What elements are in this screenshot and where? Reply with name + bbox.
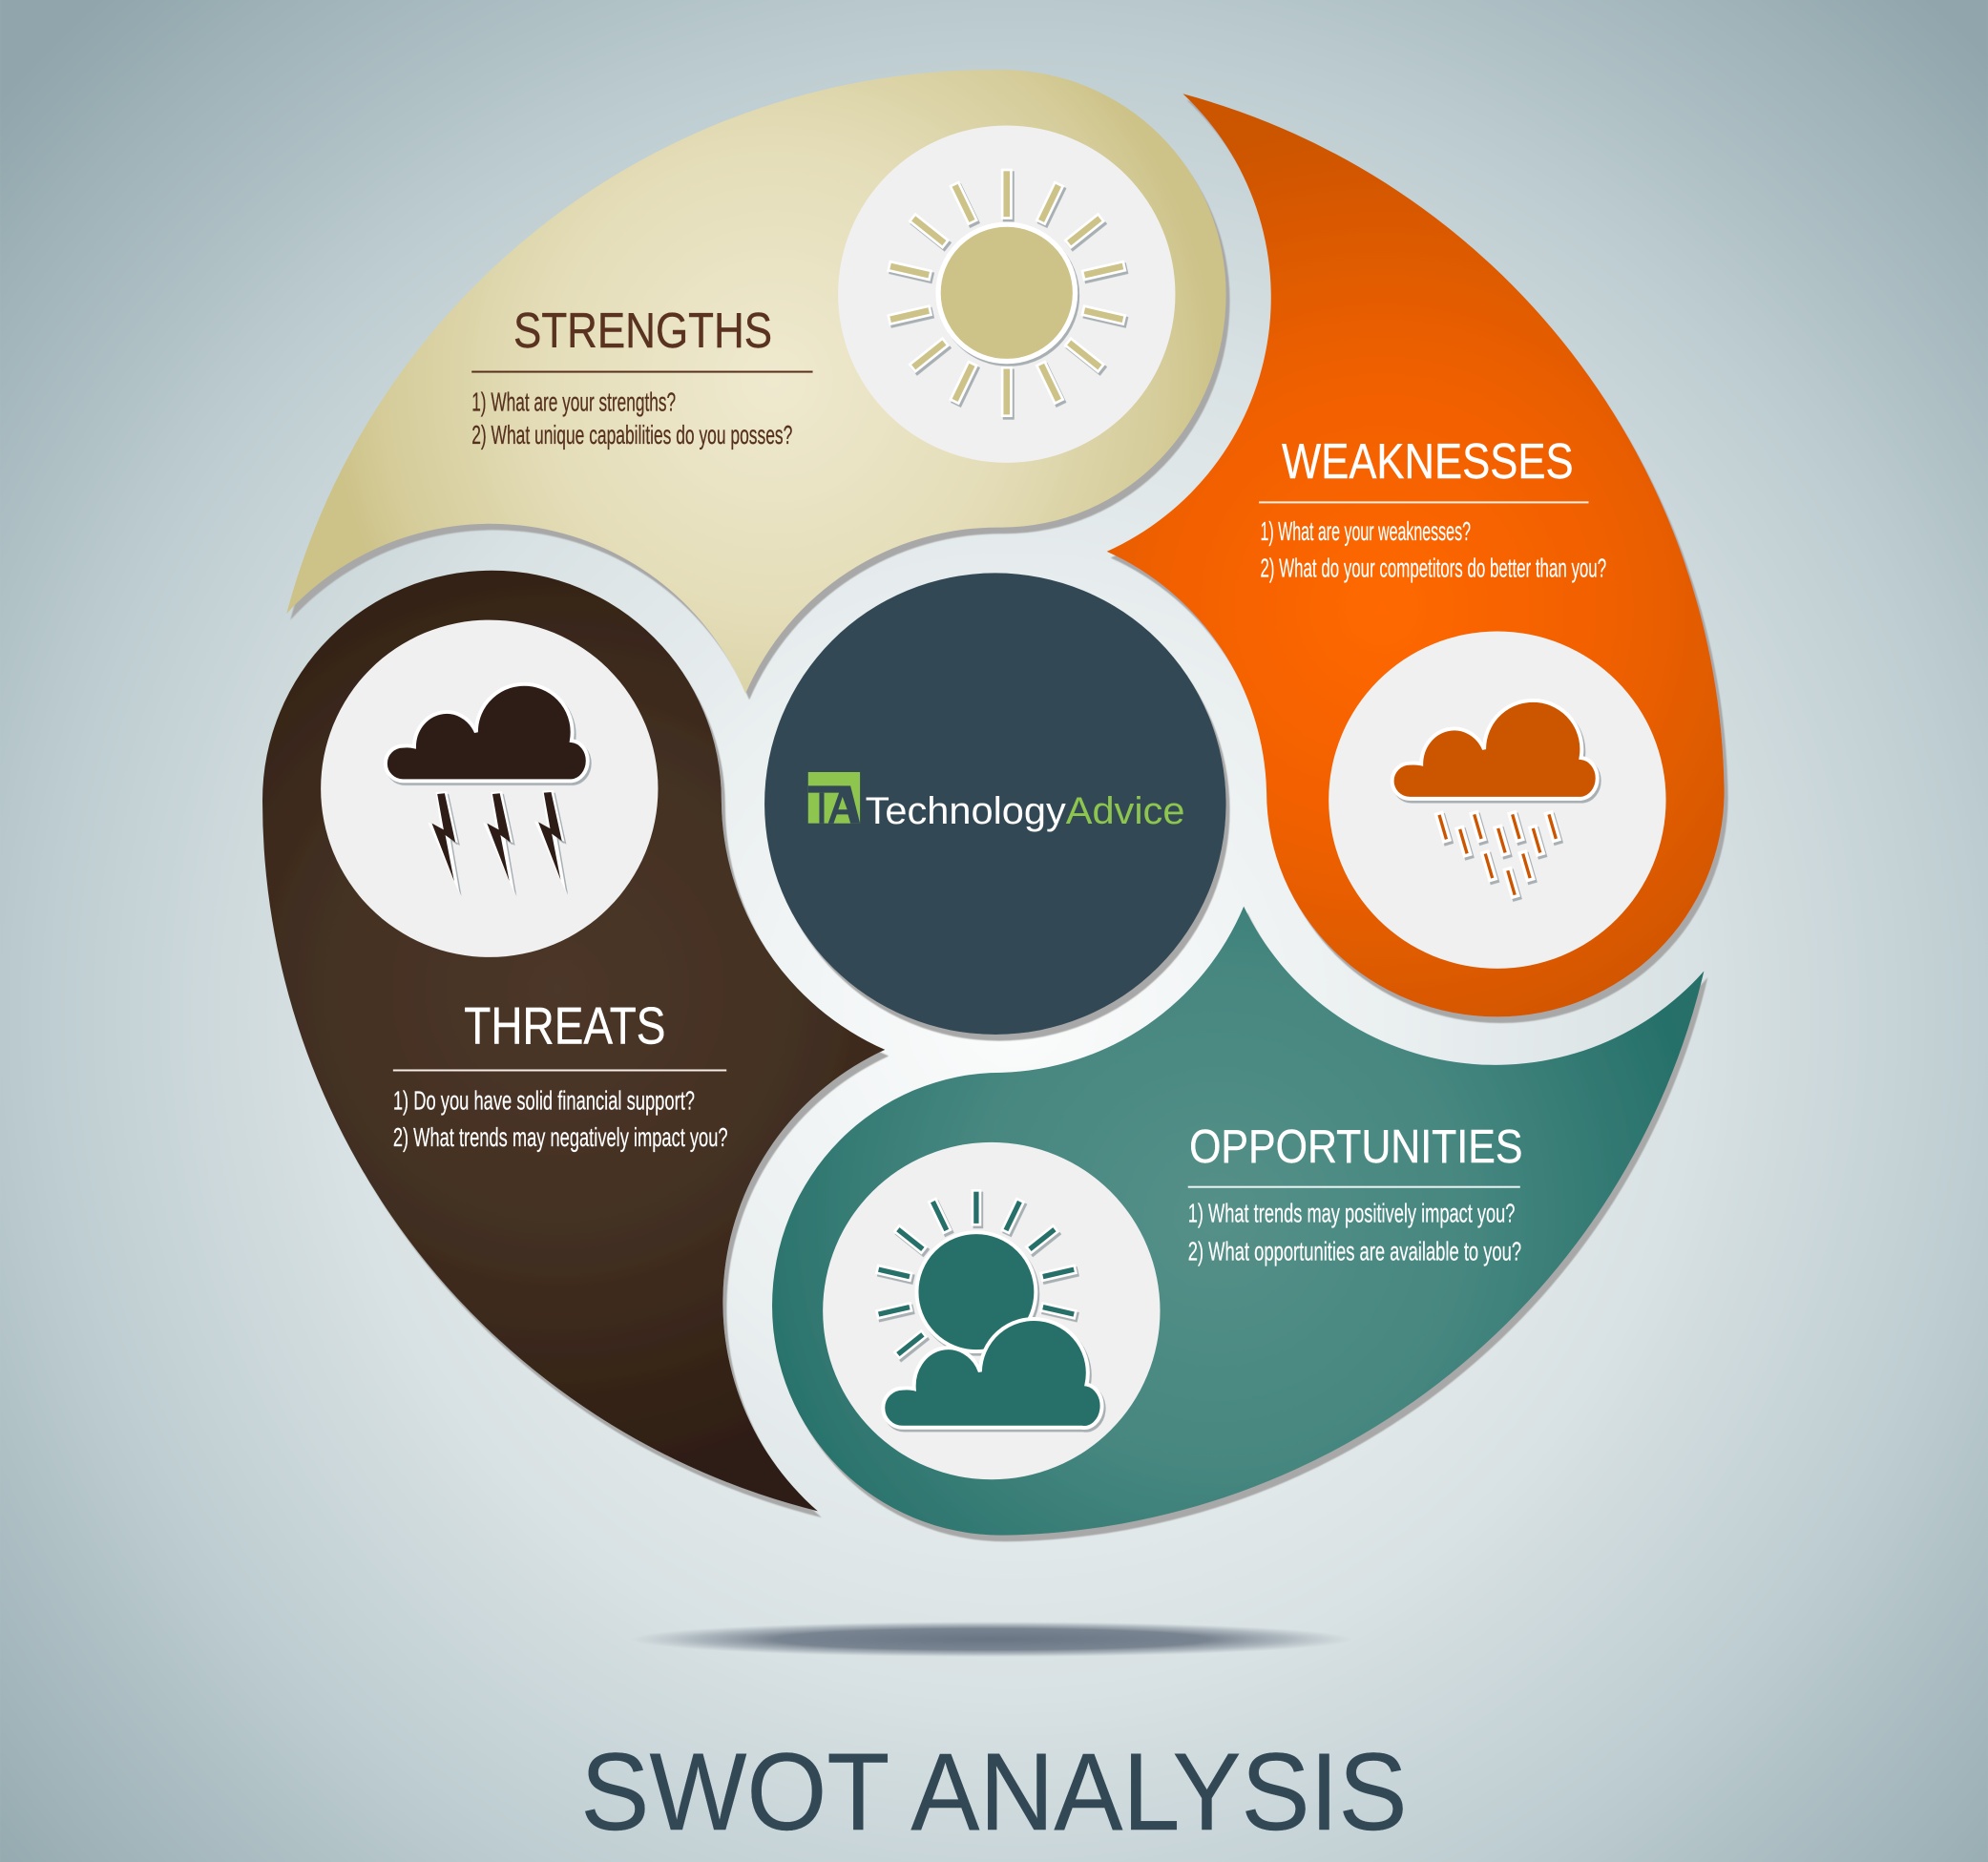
threats icon circle xyxy=(321,620,658,957)
weaknesses petal shape xyxy=(1107,94,1725,1016)
panel: weaknesses xyxy=(1107,94,1725,1016)
opportunities questions: 2) What opportunities are available to you? xyxy=(1188,1236,1521,1266)
opportunities questions xyxy=(1188,1199,1521,1266)
panel: threats xyxy=(262,571,885,1511)
opportunities icon circle xyxy=(823,1142,1161,1479)
icon: storm cloud xyxy=(386,684,588,894)
icon: TA logo mark xyxy=(808,772,860,824)
strengths heading: STRENGTHS xyxy=(513,303,772,358)
threats questions: 1) Do you have solid financial support? xyxy=(393,1085,695,1115)
icon: sun xyxy=(889,170,1125,416)
threats petal shape xyxy=(262,571,885,1511)
panel: center logo circle xyxy=(764,573,1226,1035)
opportunities petal shape xyxy=(772,907,1704,1536)
opportunities questions: 1) What trends may positively impact you? xyxy=(1188,1199,1515,1228)
logo wordmark: Technology Advice xyxy=(866,790,1184,832)
ground shadow xyxy=(630,1621,1352,1657)
threats questions xyxy=(393,1085,728,1152)
icon: sun behind cloud xyxy=(876,1190,1102,1428)
opportunities heading: OPPORTUNITIES xyxy=(1189,1121,1522,1173)
panel: opportunities xyxy=(772,907,1704,1536)
strengths petal shape xyxy=(286,70,1226,694)
weaknesses heading: WEAKNESSES xyxy=(1282,433,1574,489)
threats heading: THREATS xyxy=(464,996,665,1055)
threats questions: 2) What trends may negatively impact you? xyxy=(393,1122,728,1152)
strengths questions: 2) What unique capabilities do you posses? xyxy=(471,420,792,450)
weaknesses icon circle xyxy=(1329,632,1666,969)
weaknesses questions: 2) What do your competitors do better than you? xyxy=(1260,553,1606,582)
weaknesses questions xyxy=(1260,516,1606,582)
strengths questions: 1) What are your strengths? xyxy=(471,387,676,416)
panel: strengths xyxy=(286,70,1226,694)
icon: rain cloud xyxy=(1392,701,1598,898)
title: SWOT ANALYSIS xyxy=(580,1730,1408,1853)
strengths questions xyxy=(471,387,792,450)
weaknesses questions: 1) What are your weaknesses? xyxy=(1260,516,1471,546)
strengths icon circle xyxy=(838,126,1175,463)
